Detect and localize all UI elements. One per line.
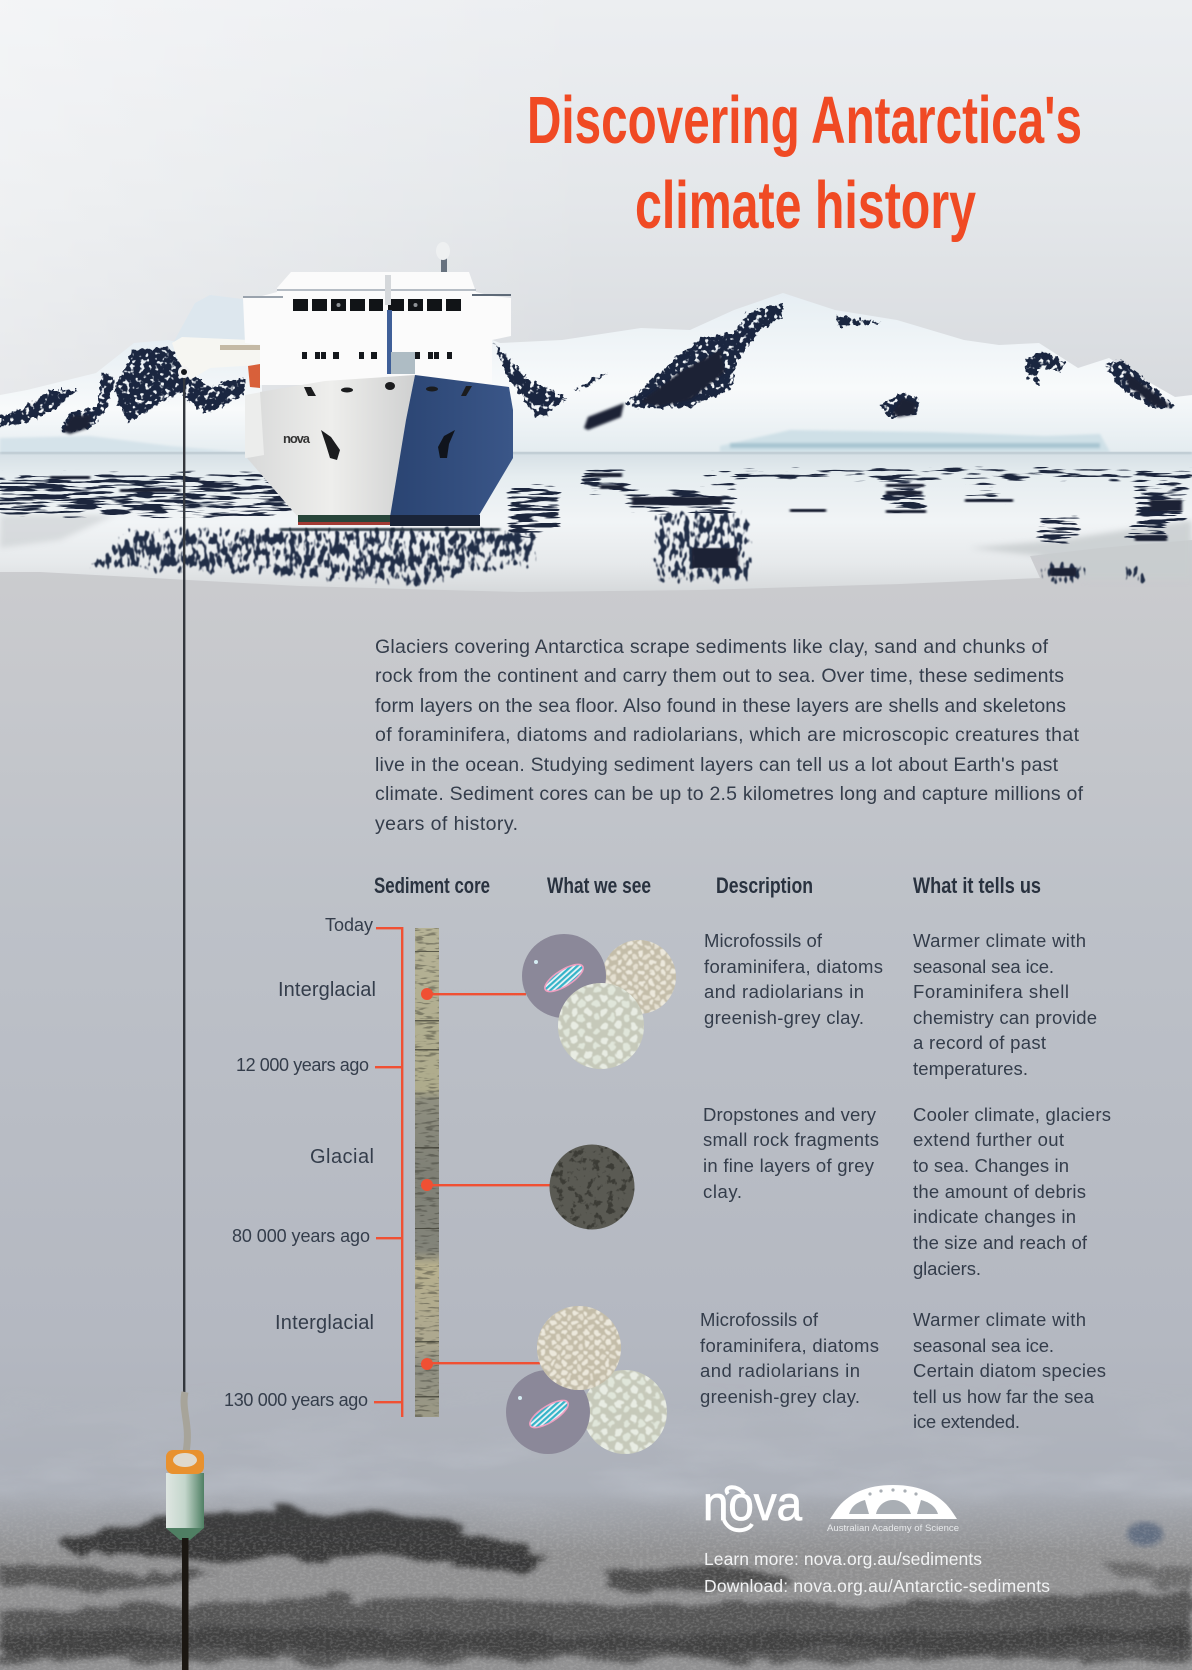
description: row 1: Microfossils of <box>704 930 823 951</box>
intro paragraph: Glaciers covering Antarctica scrape sediments like clay, sand and chunks of <box>375 636 1049 658</box>
table headings <box>374 873 1041 898</box>
reflected shoreline <box>0 452 1192 454</box>
lifeboat davit <box>172 337 260 388</box>
grey open water patches <box>0 515 1192 580</box>
description: row 1 <box>704 930 883 1028</box>
corer head <box>166 1473 204 1528</box>
description: row 1: foraminifera, diatoms <box>704 956 883 977</box>
timeline bracket <box>374 927 403 1417</box>
description: row 1: greenish-grey clay. <box>704 1007 864 1028</box>
description: row 2: Dropstones and very <box>703 1104 877 1125</box>
what it tells us: row 3: Certain diatom species <box>913 1360 1106 1381</box>
glacier front <box>0 430 1110 454</box>
hull white side <box>247 375 415 517</box>
hull blue side <box>390 375 513 517</box>
superstructure <box>243 272 511 385</box>
water surface <box>0 452 1192 592</box>
sediment base <box>0 1490 1192 1555</box>
mountain: left range <box>0 340 262 456</box>
what it tells us: row 1: a record of past <box>913 1032 1046 1053</box>
links: Learn more: nova.org.au/sediments <box>704 1549 982 1569</box>
sediment grain <box>0 1510 1192 1670</box>
side wall below lifeboat <box>245 392 268 458</box>
what it tells us: row 3 <box>913 1309 1106 1432</box>
what it tells us: row 1: temperatures. <box>913 1058 1028 1079</box>
links <box>704 1549 1050 1596</box>
what it tells us: row 2: to sea. Changes in <box>913 1155 1069 1176</box>
what it tells us: row 1: seasonal sea ice. <box>913 956 1054 977</box>
micrograph cluster: first interglacial <box>522 933 683 1075</box>
what it tells us: row 3: seasonal sea ice. <box>913 1335 1054 1356</box>
connector: second interglacial sample <box>421 1358 540 1370</box>
description: row 2 <box>703 1104 879 1202</box>
table headings: What it tells us <box>913 873 1041 898</box>
table headings: What we see <box>547 873 651 898</box>
cabin windows <box>302 352 452 359</box>
intro paragraph: live in the ocean. Studying sediment layers can tell us a lot about Earth's past <box>375 754 1059 776</box>
what it tells us: row 1: Foraminifera shell <box>913 981 1069 1002</box>
what it tells us: row 2: the amount of debris <box>913 1181 1086 1202</box>
description: row 3: and radiolarians in <box>700 1360 860 1381</box>
description: row 2: small rock fragments <box>703 1129 879 1150</box>
radar dome <box>436 242 450 275</box>
timeline labels: 80 000 years ago <box>232 1226 370 1246</box>
what it tells us: row 2: indicate changes in <box>913 1206 1076 1227</box>
what it tells us: row 3: ice extended. <box>913 1411 1020 1432</box>
micrograph: glacial dropstones <box>550 1144 634 1230</box>
ship <box>172 242 513 526</box>
title: climate history <box>635 168 976 243</box>
description: row 3: Microfossils of <box>700 1309 819 1330</box>
intro paragraph: climate. Sediment cores can be up to 2.5 kilometres long and capture millions of <box>375 783 1084 805</box>
icebergs and mountains <box>0 293 1192 456</box>
core pipe <box>182 1538 188 1670</box>
what it tells us: row 2: glaciers. <box>913 1258 981 1279</box>
what it tells us: row 3: Warmer climate with <box>913 1309 1086 1330</box>
corer cable <box>178 366 190 1392</box>
sediment blue stone <box>1127 1522 1163 1546</box>
what it tells us: row 2: extend further out <box>913 1129 1064 1150</box>
description: row 2: in fine layers of grey <box>703 1155 875 1176</box>
timeline labels: 130 000 years ago <box>224 1390 368 1410</box>
logo: Australian Academy of Science <box>827 1485 959 1534</box>
ship reflection <box>36 525 540 590</box>
intro paragraph: years of history. <box>375 813 518 835</box>
sea reflection <box>0 452 1192 592</box>
timeline labels: 12 000 years ago <box>236 1055 369 1075</box>
logo: nova: nova <box>703 1478 802 1531</box>
description: row 3 <box>700 1309 879 1407</box>
title <box>527 83 1082 243</box>
what it tells us: row 1: chemistry can provide <box>913 1007 1097 1028</box>
intro paragraph: of foraminifera, diatoms and radiolarians, which are microscopic creatures that <box>375 724 1080 746</box>
mountain: right range <box>480 293 1192 452</box>
timeline labels: Interglacial <box>275 1312 374 1334</box>
what it tells us: row 1: Warmer climate with <box>913 930 1086 951</box>
what it tells us: row 2: Cooler climate, glaciers <box>913 1104 1111 1125</box>
waterline <box>298 515 480 526</box>
intro paragraph: form layers on the sea floor. Also found in these layers are shells and skeletons <box>375 695 1066 717</box>
what it tells us: row 1 <box>913 930 1097 1079</box>
solid reflection strokes <box>50 473 1182 576</box>
sediment dark bands <box>0 1511 1192 1660</box>
what it tells us: row 2 <box>913 1104 1111 1279</box>
hull logo: nova <box>283 431 311 446</box>
timeline labels: Today <box>325 915 373 935</box>
what it tells us: row 3: tell us how far the sea <box>913 1386 1095 1407</box>
rope <box>184 1392 187 1452</box>
what it tells us: row 2: the size and reach of <box>913 1232 1088 1253</box>
sediment corer <box>166 1392 204 1670</box>
description: row 3: greenish-grey clay. <box>700 1386 860 1407</box>
logo: Australian Academy of Science: Australian Academy of Science <box>827 1523 959 1534</box>
description: row 3: foraminifera, diatoms <box>700 1335 879 1356</box>
horizontal reflection streaks <box>0 464 1192 549</box>
timeline labels: Glacial <box>310 1146 374 1168</box>
mountain: left far peak <box>172 295 262 400</box>
hull ports and anchors <box>304 382 472 460</box>
sediment core strip <box>415 928 439 1417</box>
intro paragraph <box>375 636 1084 835</box>
solid rock patches <box>62 350 1172 434</box>
timeline labels: Interglacial <box>278 979 376 1001</box>
table headings: Sediment core <box>374 873 490 898</box>
fog above sediment <box>278 1478 1192 1494</box>
connector: glacial sample <box>421 1179 550 1191</box>
dark rock outcrops <box>0 303 1175 433</box>
description: row 2: clay. <box>703 1181 742 1202</box>
intro paragraph: rock from the continent and carry them out to sea. Over time, these sediments <box>375 665 1064 687</box>
timeline labels <box>224 915 376 1410</box>
orange collar <box>166 1450 204 1474</box>
links: Download: nova.org.au/Antarctic-sediments <box>704 1576 1050 1596</box>
mast <box>385 275 415 374</box>
table headings: Description <box>716 873 813 898</box>
sediment floor <box>0 1478 1192 1670</box>
description: row 1: and radiolarians in <box>704 981 864 1002</box>
bridge windows <box>293 299 461 311</box>
connector: first interglacial sample <box>421 988 526 1000</box>
micrograph cluster: second interglacial <box>506 1306 667 1454</box>
rock reflections <box>650 508 1156 586</box>
